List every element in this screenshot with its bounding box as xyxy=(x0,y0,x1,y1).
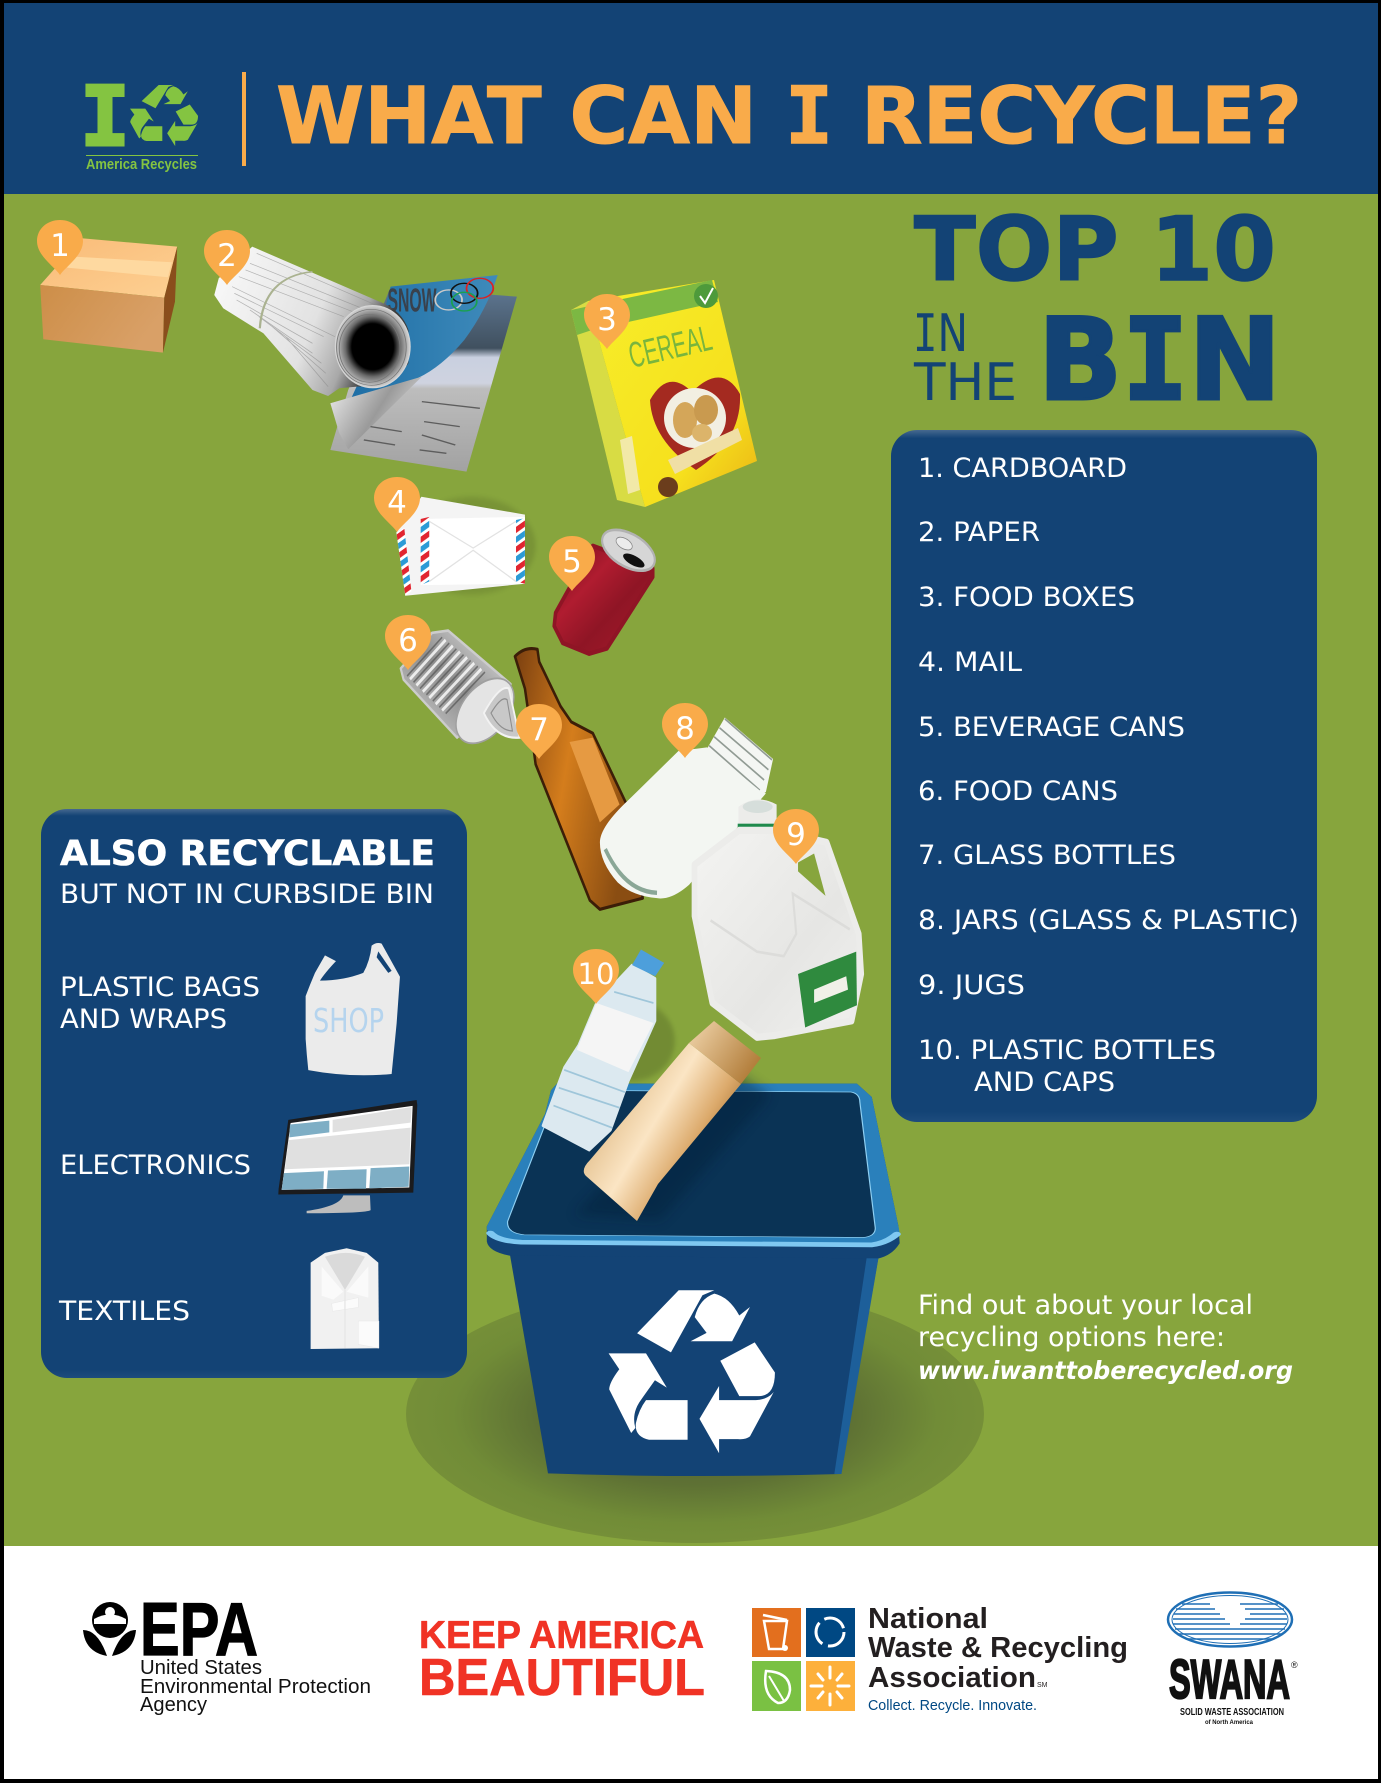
pin 3: 3 xyxy=(597,302,617,338)
list items: 4. MAIL xyxy=(918,647,1022,678)
pin 5 xyxy=(549,536,595,591)
list items: 1. CARDBOARD xyxy=(918,453,1127,484)
item: beverage can xyxy=(554,522,659,654)
logo: EPA xyxy=(83,1587,371,1716)
SWANA full name: SOLID WASTE ASSOCIATION xyxy=(1180,1706,1284,1718)
list items: 2. PAPER xyxy=(918,517,1040,548)
heading line: top 10: TOP 10 xyxy=(914,198,1276,301)
logo recycling arrows xyxy=(130,85,198,146)
logo: SWANA xyxy=(1168,1592,1298,1726)
bin interior xyxy=(508,1090,875,1237)
heading line: bin: BIN xyxy=(1038,294,1281,426)
association name: Waste & Recycling xyxy=(868,1632,1128,1664)
registered mark: ® xyxy=(1291,1660,1298,1670)
main green background xyxy=(4,194,1378,1546)
pin 4: 4 xyxy=(387,485,407,521)
item: newspaper roll xyxy=(214,247,411,396)
list items: 9. JUGS xyxy=(918,970,1025,1001)
orange tile with cart xyxy=(752,1608,801,1657)
panel: top 10 list xyxy=(891,430,1317,1122)
EPA agency name: United States xyxy=(140,1657,262,1679)
association name: National xyxy=(868,1603,988,1635)
pin 4 xyxy=(374,477,420,532)
link text: local recycling options: Find out about your local xyxy=(918,1290,1253,1321)
SWANA region: of North America xyxy=(1205,1719,1253,1726)
list items: 6. FOOD CANS xyxy=(918,776,1118,807)
item: food can xyxy=(401,631,524,756)
label: textiles: TEXTILES xyxy=(58,1296,190,1327)
list items: 8. JARS (GLASS & PLASTIC) xyxy=(918,905,1299,936)
pin 1: 1 xyxy=(50,228,70,264)
item: cereal box xyxy=(571,280,757,507)
pin 7 xyxy=(516,704,562,759)
association name: SM xyxy=(1037,1682,1048,1689)
bin rim xyxy=(487,1084,900,1258)
logo caption: America Recycles xyxy=(86,157,197,173)
cereal box wordmark: CEREAL xyxy=(625,317,716,376)
item: glass bottle xyxy=(515,649,643,909)
footer band xyxy=(4,1546,1378,1779)
list items: AND CAPS xyxy=(974,1067,1115,1098)
logo: Keep America Beautiful: KEEP AMERICA xyxy=(419,1614,704,1657)
heading line: in: IN xyxy=(913,304,968,364)
EPA wordmark: EPA xyxy=(140,1587,258,1671)
label: electronics: ELECTRONICS xyxy=(60,1150,251,1181)
label: plastic bags and wraps xyxy=(60,972,260,1035)
logo: Keep America Beautiful: BEAUTIFUL xyxy=(419,1649,705,1707)
panel heading: ALSO RECYCLABLE xyxy=(60,834,435,874)
list items: 5. BEVERAGE CANS xyxy=(918,712,1185,743)
link text: local recycling options xyxy=(918,1290,1293,1385)
item: magazine xyxy=(330,275,517,472)
pin 10 xyxy=(573,949,619,1004)
pin 3 xyxy=(584,294,630,349)
SWANA globe xyxy=(1168,1592,1292,1646)
number pins xyxy=(37,220,819,1004)
ground shadow under bin xyxy=(406,1285,984,1543)
logo: Keep America Beautiful xyxy=(419,1614,705,1707)
logo: National Waste and Recycling Association xyxy=(752,1603,1128,1714)
recycling symbol xyxy=(609,1290,775,1453)
pin 10: 10 xyxy=(578,957,614,991)
pin 2: 2 xyxy=(217,238,237,274)
heading: top 10 in the bin xyxy=(913,198,1281,426)
green tile with leaf xyxy=(752,1661,801,1711)
pin 9: 9 xyxy=(786,817,806,853)
item: glass jar xyxy=(600,718,773,898)
link text: local recycling options: recycling options here: xyxy=(918,1322,1225,1353)
list items: 3. FOOD BOXES xyxy=(918,582,1135,613)
title: WHAT CAN I RECYCLE? xyxy=(276,72,1302,162)
SWANA wordmark: SWANA xyxy=(1169,1648,1290,1710)
item: cardboard box xyxy=(40,238,177,353)
association name: Association xyxy=(868,1662,1036,1694)
blue tile with arrows xyxy=(806,1608,855,1657)
item: water bottle xyxy=(543,949,675,1150)
logo: America Recycles xyxy=(80,70,198,173)
item: envelopes xyxy=(396,497,536,596)
logo letter I: I xyxy=(80,70,130,165)
icon: plastic bag xyxy=(306,943,400,1075)
association name xyxy=(868,1603,1128,1694)
item: tan plastic bottle xyxy=(575,1021,770,1221)
recycling bin xyxy=(487,1084,900,1476)
EPA agency name xyxy=(140,1657,371,1716)
item: plastic jug xyxy=(695,799,861,1037)
pin 5: 5 xyxy=(562,544,582,580)
item: magazine: SNOW xyxy=(387,282,437,319)
icon: folded shirt xyxy=(311,1248,379,1349)
association tagline: Collect. Recycle. Innovate. xyxy=(868,1698,1037,1714)
EPA agency name: Environmental Protection xyxy=(140,1676,371,1698)
pin 6 xyxy=(385,615,431,670)
header band xyxy=(4,3,1378,194)
icon: plastic bag: SHOP xyxy=(313,1001,384,1040)
EPA flower icon xyxy=(83,1602,136,1656)
header divider xyxy=(242,72,246,166)
pin 2 xyxy=(204,230,250,285)
list items: 7. GLASS BOTTLES xyxy=(918,840,1176,871)
yellow tile with burst xyxy=(806,1661,855,1711)
pin 9 xyxy=(773,809,819,864)
list items: 10. PLASTIC BOTTLES xyxy=(918,1035,1216,1066)
heading line: the: THE xyxy=(913,353,1017,413)
website address: www.iwanttoberecycled.org xyxy=(918,1356,1293,1385)
list items xyxy=(918,453,1299,1098)
pin 7: 7 xyxy=(529,712,549,748)
EPA agency name: Agency xyxy=(140,1694,207,1716)
label: plastic bags and wraps: AND WRAPS xyxy=(60,1004,227,1035)
panel: also recyclable xyxy=(41,809,467,1378)
pin 8: 8 xyxy=(675,711,695,747)
label: plastic bags and wraps: PLASTIC BAGS xyxy=(60,972,260,1003)
pin 1 xyxy=(37,220,83,275)
panel subheading: BUT NOT IN CURBSIDE BIN xyxy=(60,879,434,910)
bin body xyxy=(509,1252,879,1476)
icon: computer monitor xyxy=(278,1100,417,1213)
pin 6: 6 xyxy=(398,623,418,659)
pin 8 xyxy=(662,703,708,758)
